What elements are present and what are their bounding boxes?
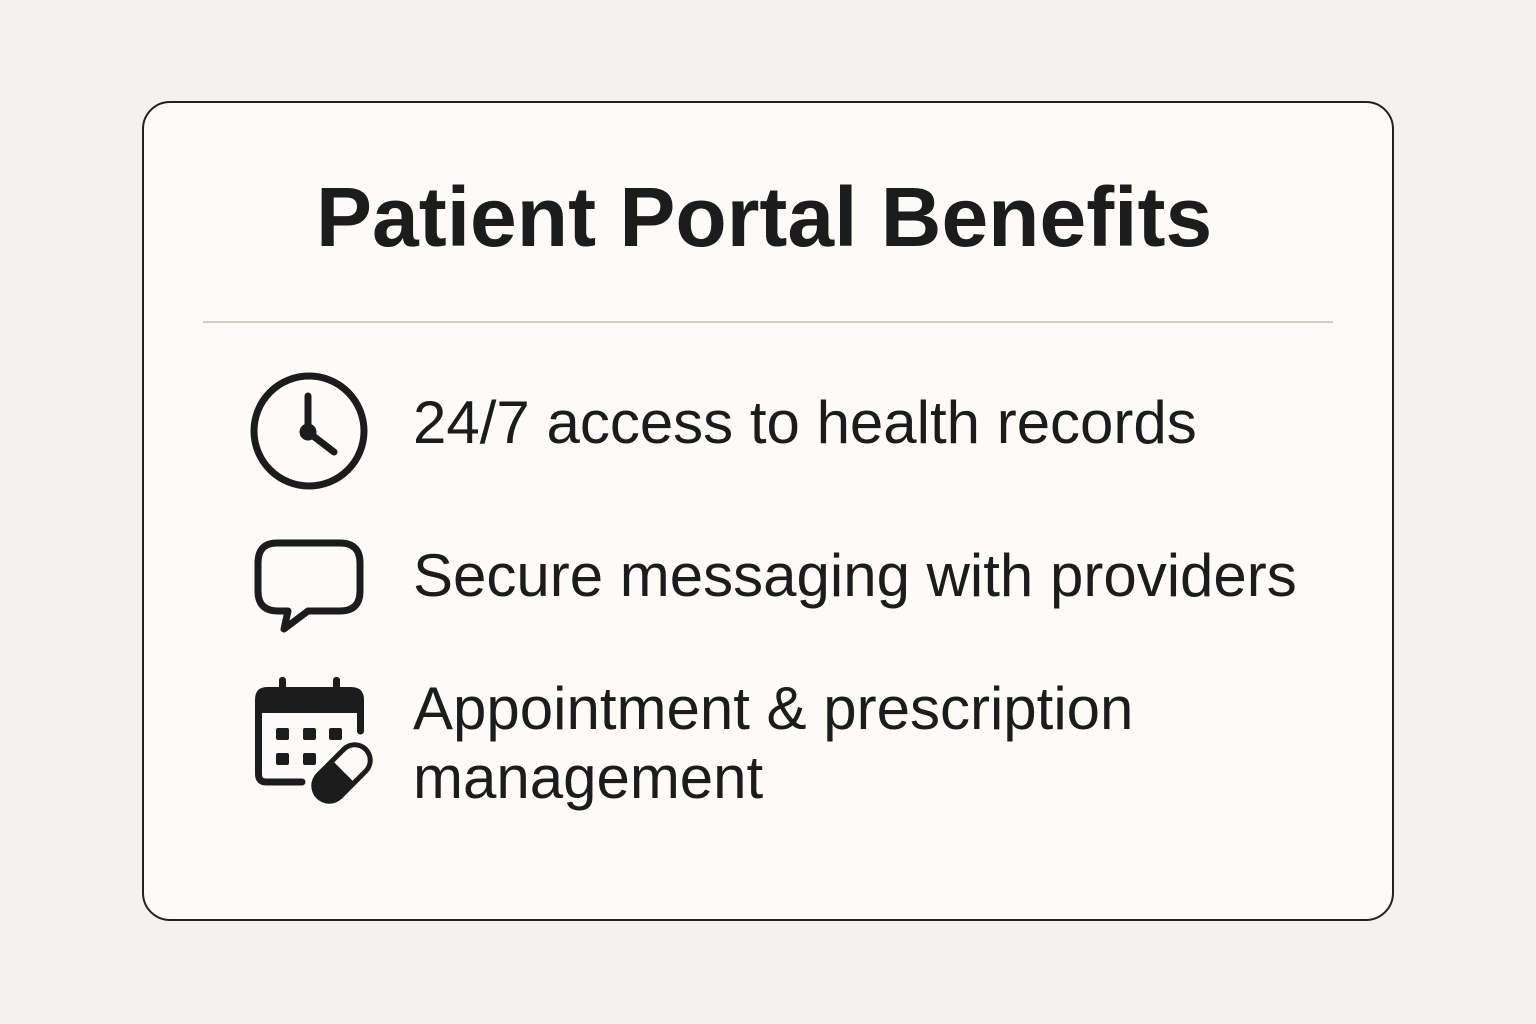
text: item 3 [413, 675, 1133, 811]
text: item 1: 24/7 access to health records [413, 389, 1197, 456]
icon: clock [254, 376, 364, 486]
icon: speech bubble [258, 543, 360, 629]
panel: card [142, 101, 1394, 921]
text: item 3: Appointment & prescription [413, 675, 1133, 742]
icon: calendar with pill [255, 677, 380, 811]
text: item 2: Secure messaging with providers [413, 542, 1297, 609]
text: item 3: management [413, 744, 763, 811]
title: Patient Portal Benefits [316, 170, 1212, 264]
